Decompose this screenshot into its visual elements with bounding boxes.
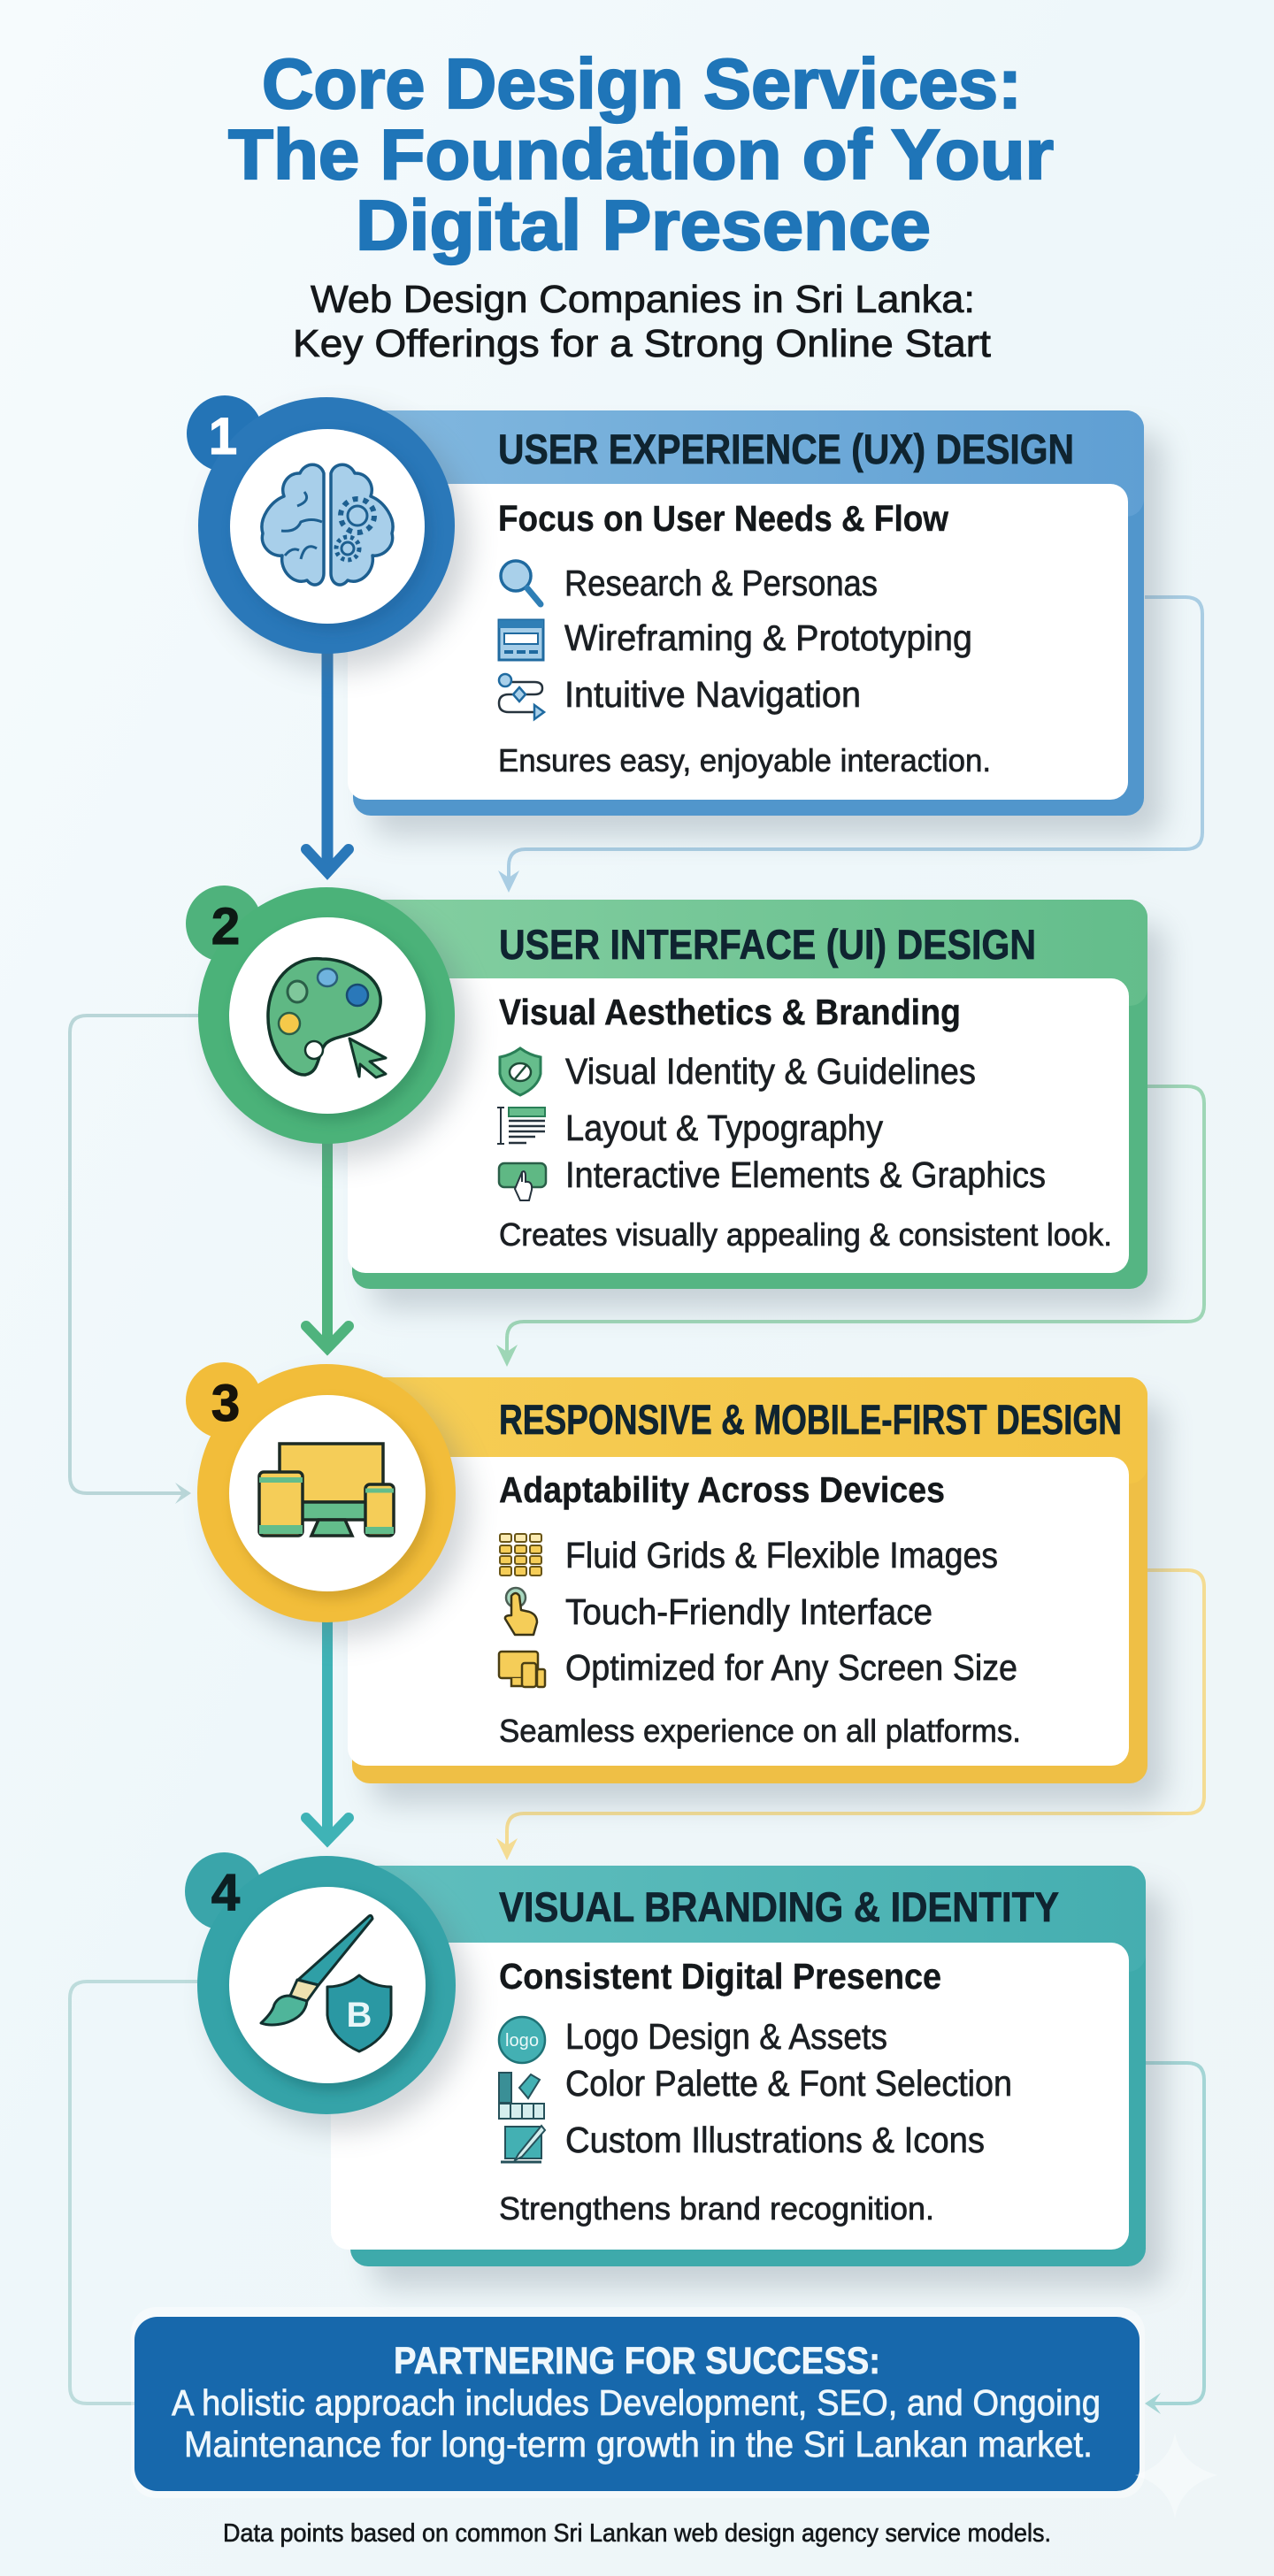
icon: brush and shield: B: [347, 1996, 372, 2035]
arrow: flow 3 to 4: [306, 1619, 349, 1840]
item: visual identity: Visual Identity & Guidelines: [565, 1051, 976, 1092]
banner text: A holistic approach includes Development, SEO, and Ongoing: [172, 2382, 1101, 2423]
panel: card 3 responsive: [348, 1377, 1165, 1805]
subtitle: Key Offerings for a Strong Online Start: [293, 322, 991, 365]
panel: card 2 user interface: [348, 900, 1165, 1309]
callout: partnering for success banner: [131, 2307, 1145, 2498]
card 4 heading: VISUAL BRANDING & IDENTITY: [499, 1883, 1059, 1930]
card 1 note: Ensures easy, enjoyable interaction.: [498, 742, 991, 778]
icon: logo: logo: [505, 2031, 539, 2051]
card 1 white body: [348, 484, 1128, 800]
icon: shield: [500, 1048, 541, 1095]
step number 3: 3: [211, 1375, 240, 1432]
icon: step 2 medallion: [186, 886, 470, 1161]
item: color palette: Color Palette & Font Selection: [565, 2063, 1012, 2104]
card 1 subheading: Focus on User Needs & Flow: [498, 498, 948, 539]
title: Core Design Services:: [262, 44, 1022, 123]
footnote: Data points based on common Sri Lankan web design agency service models.: [223, 2519, 1051, 2548]
arrow: connector card 2 to card 3 (right): [496, 1086, 1204, 1367]
step number 4: 4: [211, 1864, 240, 1921]
icon: step 4 medallion: [185, 1852, 470, 2130]
card 2 white body: [348, 978, 1129, 1273]
icon: palette swatches: [499, 2073, 544, 2119]
arrow: connector card 4 to banner (left): [70, 1982, 198, 2404]
subtitle: Web Design Companies in Sri Lanka:: [311, 278, 975, 321]
title: The Foundation of Your: [228, 115, 1054, 194]
card 4 note: Strengthens brand recognition.: [499, 2190, 934, 2227]
icon: layout: [497, 1108, 545, 1144]
icon: responsive devices: [259, 1444, 394, 1536]
icon: logo: [499, 2017, 545, 2063]
card 4 white body: [331, 1943, 1129, 2250]
icon: brush and shield: [261, 1915, 391, 2051]
arrow: connector card 4 to banner (right): [1145, 2063, 1204, 2414]
subtitle: [293, 278, 991, 365]
item: illustrations: Custom Illustrations & Icons: [565, 2120, 985, 2160]
arrow: flow 1 to 2: [306, 650, 349, 872]
icon: step 3 medallion: [186, 1362, 470, 1638]
item: touch: Touch-Friendly Interface: [565, 1591, 932, 1632]
item: optimized: Optimized for Any Screen Size: [565, 1647, 1017, 1688]
banner text: [172, 2382, 1101, 2465]
card 3 heading: RESPONSIVE & MOBILE-FIRST DESIGN: [499, 1396, 1122, 1443]
icon: magnifier: [501, 561, 541, 604]
card 1 heading: USER EXPERIENCE (UX) DESIGN: [498, 426, 1074, 472]
item: wireframing: Wireframing & Prototyping: [564, 617, 972, 658]
step number 1: 1: [209, 408, 237, 465]
arrow: connector card 1 to card 2: [498, 597, 1202, 893]
icon: custom illustration: [501, 2126, 545, 2162]
card 2 heading: USER INTERFACE (UI) DESIGN: [499, 921, 1036, 968]
arrow: flow 2 to 3: [306, 1141, 349, 1348]
arrow: connector card 3 to card 4: [496, 1570, 1204, 1860]
panel: card 4 visual branding: [331, 1866, 1165, 2288]
icon: small devices: [499, 1652, 545, 1687]
panel: card 1 user experience: [348, 410, 1163, 837]
item: layout: Layout & Typography: [565, 1108, 883, 1148]
icon: brain with gears: [262, 464, 393, 585]
icon: touch hand: [505, 1588, 537, 1635]
card 3 subheading: Adaptability Across Devices: [499, 1469, 945, 1510]
item: fluid grids: Fluid Grids & Flexible Images: [565, 1535, 998, 1576]
item: interactive: Interactive Elements & Graphics: [565, 1154, 1046, 1195]
card 4 subheading: Consistent Digital Presence: [499, 1956, 941, 1997]
title: [228, 44, 1054, 264]
item: navigation: Intuitive Navigation: [564, 674, 861, 715]
card 3 white body: [348, 1457, 1129, 1766]
banner heading: PARTNERING FOR SUCCESS:: [394, 2340, 880, 2382]
title: Digital Presence: [356, 186, 931, 264]
banner text: Maintenance for long-term growth in the Sri Lankan market.: [184, 2424, 1093, 2465]
step number 2: 2: [211, 898, 240, 955]
icon: wireframe: [499, 620, 543, 660]
icon: sparkle: [1135, 2433, 1217, 2518]
item: logo design: Logo Design & Assets: [565, 2016, 887, 2057]
arrow: connector card 2 to card 3 (left): [70, 1016, 198, 1504]
icon: button press: [499, 1163, 546, 1200]
icon: step 1 medallion: [187, 395, 470, 671]
card 2 note: Creates visually appealing & consistent look.: [499, 1216, 1112, 1253]
icon: fluid grid: [500, 1534, 541, 1576]
icon: palette and cursor: [268, 959, 386, 1077]
item: research: Research & Personas: [564, 563, 878, 603]
card 3 note: Seamless experience on all platforms.: [499, 1713, 1021, 1749]
icon: navigation: [499, 674, 544, 719]
card 2 subheading: Visual Aesthetics & Branding: [499, 992, 961, 1032]
